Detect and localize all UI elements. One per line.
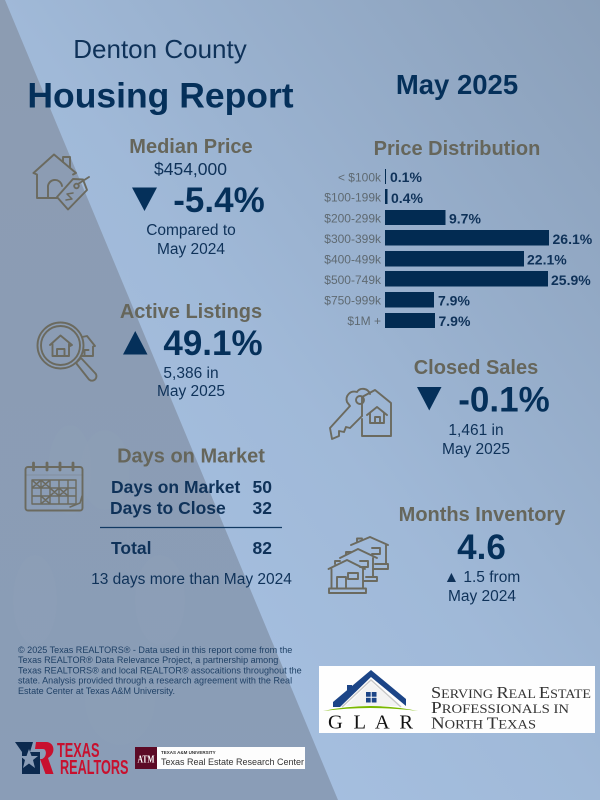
panel: closed sales: [330, 357, 550, 458]
icon: calendar: [26, 463, 82, 510]
listing month: May 2025: [157, 383, 225, 400]
logo mark: [15, 742, 54, 774]
sales month: May 2025: [442, 441, 510, 458]
bar chart: [324, 169, 593, 329]
icon: magnifier over house: [38, 322, 96, 381]
disclaimer text: Texas REALTOR® Data Relevance Project, a partnership among: [18, 655, 278, 665]
logo wordmark: TEXAS: [57, 739, 100, 762]
tagline: [431, 683, 591, 732]
arrow: down: [417, 387, 442, 410]
row: 500-749k: 25.9%: [551, 272, 591, 288]
icon: house with price tag: [34, 154, 89, 210]
logo: Texas Real Estate Research Center: [135, 747, 305, 769]
row: 1M plus: [347, 313, 471, 329]
row: 300-399k: [324, 230, 593, 247]
row: 100-199k: [324, 189, 423, 206]
inventory value: 4.6: [457, 528, 506, 567]
row: 750-999k: $750-999k: [324, 294, 382, 308]
disclaimer text: © 2025 Texas REALTORS® - Data used in this report come from the: [18, 645, 292, 655]
value: median price: $454,000: [154, 159, 227, 179]
heading: months inventory: Months Inventory: [399, 504, 566, 526]
logo wordmark: [57, 739, 128, 779]
logo emblem: ATM: [138, 754, 155, 766]
percent change: -0.1%: [458, 380, 550, 420]
disclaimer text: state. Analysis provided through a research agreement with the Real: [18, 676, 292, 686]
row: 750-999k: [324, 292, 470, 308]
row: 500-749k: [324, 271, 591, 288]
row: 200-299k: 9.7%: [449, 210, 481, 226]
logo: GLAR banner: [319, 666, 595, 734]
tagline: SERVING REAL ESTATE: [431, 683, 591, 702]
comparison text: 13 days more than May 2024: [91, 571, 292, 588]
row: 750-999k: 7.9%: [438, 292, 470, 308]
row: days on market: 50: [252, 477, 272, 497]
disclaimer text: Texas REALTORS® and local REALTOR® assocaitions throughout the: [18, 665, 302, 675]
row: days to close: 32: [252, 498, 272, 518]
comparison text: Compared to: [146, 222, 236, 239]
row: total: Total: [111, 538, 152, 558]
row: under 100k: [338, 169, 422, 185]
disclaimer text: [18, 645, 302, 696]
arrow: up: [123, 331, 148, 354]
percent change: -5.4%: [173, 181, 265, 220]
tagline: PROFESSIONALS IN: [431, 698, 570, 717]
row: 200-299k: [324, 210, 481, 226]
row: 500-749k: $500-749k: [324, 273, 382, 287]
panel: months inventory: [328, 504, 566, 605]
panel: price distribution: [324, 138, 593, 329]
listing count: 5,386 in: [163, 365, 219, 382]
row: 100-199k: $100-199k: [324, 190, 382, 204]
percent change: 49.1%: [163, 324, 263, 363]
GLAR wordmark: G L A R: [328, 712, 413, 734]
heading: active listings: Active Listings: [120, 301, 262, 323]
row: 400-499k: [324, 251, 567, 268]
heading: closed sales: Closed Sales: [414, 357, 538, 379]
panel: active listings: [38, 301, 263, 400]
title: Housing Report: [27, 76, 294, 116]
title: [27, 34, 294, 116]
row: 300-399k: $300-399k: [324, 232, 382, 246]
sales count: 1,461 in: [448, 422, 504, 439]
heading: median price: Median Price: [129, 136, 253, 158]
panel: days on market: [26, 446, 292, 588]
row: 400-499k: $400-499k: [324, 252, 382, 266]
row: 200-299k: $200-299k: [324, 212, 382, 226]
row: 1M plus: 7.9%: [438, 313, 471, 329]
heading: days on market: Days on Market: [117, 446, 265, 468]
logo wordmark: REALTORS: [60, 756, 128, 779]
university label: TEXAS A&M UNIVERSITY: [161, 750, 216, 755]
date heading: May 2025: [396, 69, 518, 100]
heading: price distribution: Price Distribution: [374, 138, 540, 160]
panel: median price: [34, 136, 265, 258]
diagonal dark panel: [0, 0, 338, 800]
inventory change: ▲ 1.5 from: [444, 569, 520, 586]
tagline: NORTH TEXAS: [431, 714, 536, 732]
roof: [323, 670, 418, 711]
row: 1M plus: $1M +: [347, 314, 381, 328]
row: total: [111, 538, 272, 558]
arrow: down: [132, 188, 157, 211]
disclaimer text: Estate Center at Texas A&M University.: [18, 686, 175, 696]
row: 400-499k: 22.1%: [527, 252, 567, 268]
comparison year: May 2024: [157, 241, 225, 258]
logo: Texas Realtors: [15, 739, 128, 779]
row: 300-399k: 26.1%: [552, 231, 593, 247]
icon: row of houses: [328, 537, 388, 593]
row: days on market: Days on Market: [111, 477, 241, 497]
row: total: 82: [252, 538, 272, 558]
row: 100-199k: 0.4%: [391, 190, 423, 206]
row: under 100k: 0.1%: [390, 169, 422, 185]
center name: Texas Real Estate Research Center: [161, 757, 304, 768]
inventory year: May 2024: [448, 588, 516, 605]
row: days to close: Days to Close: [110, 498, 226, 518]
icon: key with house tag: [330, 389, 391, 439]
row: under 100k: < $100k: [338, 170, 382, 184]
title: Denton County: [73, 34, 247, 64]
